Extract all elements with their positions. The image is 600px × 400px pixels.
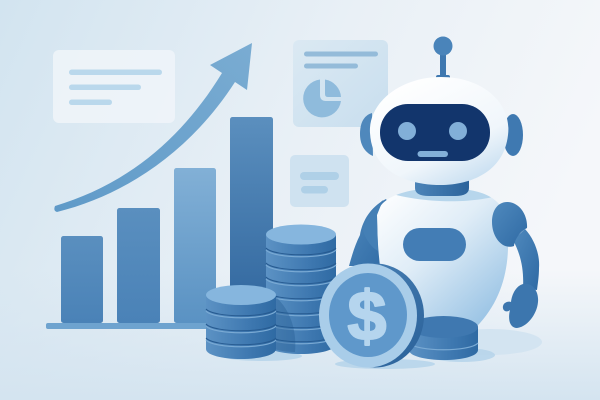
right ear	[503, 114, 523, 156]
floor shadows	[222, 348, 495, 369]
bar 2	[117, 208, 160, 323]
left ear	[360, 113, 373, 156]
panel: text card	[53, 50, 175, 123]
coin stack: short	[206, 285, 276, 359]
robot left arm	[349, 199, 392, 266]
robot neck	[415, 180, 469, 196]
coin edge	[326, 264, 424, 368]
chest panel	[403, 228, 466, 261]
panel: pie chart card	[293, 40, 388, 127]
robot collar	[396, 190, 491, 202]
chart baseline	[46, 323, 336, 329]
bar 1	[61, 236, 103, 323]
panel: small text card	[290, 155, 349, 207]
antenna	[434, 36, 452, 80]
bar chart	[46, 117, 336, 329]
robot shoulder joint	[492, 202, 527, 247]
arrow: upward growth trend	[54, 43, 252, 212]
robot body	[377, 188, 508, 337]
right eye	[449, 122, 467, 140]
large dollar coin	[319, 264, 424, 368]
robot right arm	[503, 229, 539, 328]
coin face	[329, 273, 407, 357]
robot head	[370, 77, 508, 185]
bar 4	[230, 117, 273, 323]
coin stack: tall	[266, 224, 336, 354]
robot hand	[503, 284, 538, 328]
shadow from short stack	[266, 297, 295, 352]
pie chart	[303, 80, 341, 117]
left eye	[398, 122, 416, 140]
visor	[380, 104, 490, 161]
robot floor shadow	[438, 329, 542, 355]
dollar sign: $	[348, 277, 386, 355]
robot	[349, 36, 539, 337]
coin stack: right	[409, 316, 478, 360]
mouth	[418, 151, 448, 157]
bar 3	[174, 168, 216, 323]
coin rim	[319, 264, 417, 368]
robot left shoulder shading	[363, 200, 383, 251]
